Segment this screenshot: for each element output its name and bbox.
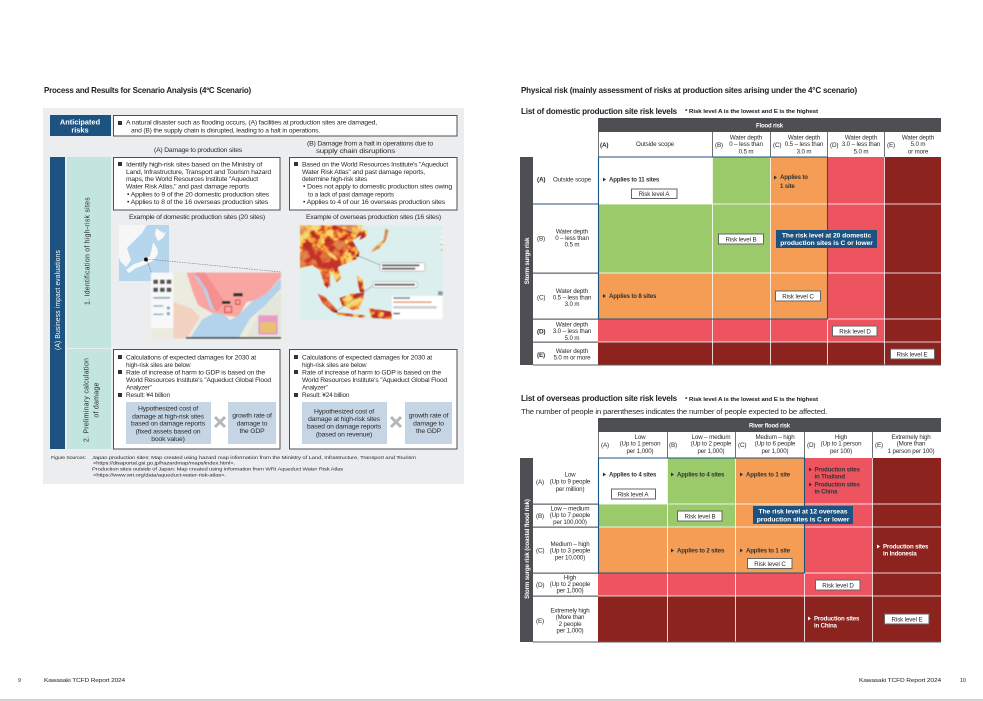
overseas row labels: (Up to 3 people (550, 548, 591, 554)
text box: identification A: Identify high-risk sites based on the Ministry of (126, 162, 262, 168)
domestic heat grid (598, 157, 941, 366)
risk level D (832, 326, 877, 336)
text box: damage calculation A: high-risk sites are below (126, 362, 191, 369)
overseas column headers: (D) (807, 442, 815, 449)
domestic row labels: 3.0 m (565, 301, 579, 308)
overseas column headers: 1 person per 100) (888, 448, 934, 455)
note: Thailand and China sites: in China (814, 488, 838, 496)
risk level E (884, 614, 929, 624)
domestic row labels (533, 157, 598, 366)
overseas row labels: (B) (536, 513, 544, 520)
domestic column headers (598, 132, 941, 157)
domestic row labels: Water depth (556, 228, 589, 236)
text box: damage calculation B: Result: ¥24 billion (302, 392, 350, 399)
text box: identification A: • Applies to 8 of the 16 overseas production sites (127, 199, 268, 206)
overseas row labels: Extremely high (550, 608, 590, 614)
callout: domestic result: production sites is C or lower (780, 240, 873, 247)
domestic row labels: 0 – less than (555, 235, 589, 242)
risk level B (678, 511, 722, 521)
overseas column headers: (More than (897, 440, 926, 448)
domestic row labels: 5.0 m (565, 335, 579, 342)
text box: identification A: Land, Infrastructure, Transport and Tourism hazard (126, 169, 272, 176)
domestic column headers: (C) (773, 142, 781, 149)
column heading B (307, 140, 434, 155)
anticipated risks text (114, 116, 457, 136)
overseas table note: * Risk level A is the lowest and E is the highest (685, 397, 818, 403)
overseas column headers: (Up to 1 person (821, 440, 862, 448)
overseas row labels: Low – medium (551, 506, 589, 512)
overseas column headers: (Up to 1 person (620, 440, 661, 448)
note: Thailand and China sites: in Thailand (814, 474, 845, 480)
storm surge axis (520, 157, 533, 365)
formula B: cost box: based on damage reports (307, 424, 382, 430)
formula B: multiply icon (391, 417, 401, 427)
callout: overseas result (753, 506, 853, 524)
overseas table heading: List of overseas production site risk levels (521, 393, 678, 403)
step 1 strip (67, 157, 111, 348)
note: applies to 11 sites: Applies to 11 sites (609, 176, 660, 184)
text box: damage calculation A: World Resources Institute's "Aqueduct Global Flood (126, 377, 272, 384)
note: Thailand and China sites (809, 466, 860, 496)
callout: domestic result (776, 230, 877, 248)
domestic column headers: Water depth (730, 134, 763, 142)
note: applies to 2 sites: Applies to 2 sites (677, 548, 725, 554)
overseas row labels: per 1,000) (556, 628, 584, 634)
text box: damage calculation A: Calculations of expected damages for 2030 at (126, 354, 256, 362)
formula A: cost box: based on damage reports (131, 420, 206, 428)
step 1 strip: 1. Identification of high-risk sites (84, 197, 92, 305)
note: China sites (808, 616, 860, 630)
business impact evaluations bar: (A) Business impact evaluations (55, 250, 62, 350)
note: Indonesia sites: in Indonesia (883, 550, 917, 558)
formula B: growth box: the GDP (416, 428, 442, 435)
risk level E: Risk level E (896, 352, 928, 358)
step 2 strip (67, 349, 111, 449)
overseas column headers: Medium – high (755, 434, 795, 441)
panel: scenario analysis process (43, 108, 464, 484)
domestic column headers: 0.5 – less than (785, 141, 824, 148)
note: applies to 4 sites, low: Applies to 4 sites (609, 472, 657, 478)
domestic column headers: Water depth (788, 134, 821, 142)
figure sources (51, 455, 416, 478)
formula A: cost box (126, 402, 211, 444)
formula B: growth box (405, 402, 452, 444)
figure sources: Production sites outside of Japan: Map created using information from WRI Aqueduct Water Risk Atlas (92, 466, 344, 472)
figure sources: <https://www.wri.org/data/aqueduct-water-risk-atlas>. (93, 472, 226, 478)
footer right: Kawasaki TCFD Report 2024 (859, 678, 941, 684)
note: Thailand and China sites: Production sites (814, 466, 860, 474)
text box: damage calculation A: Analyzer" (126, 384, 152, 392)
domestic row labels: 5.0 m or more (554, 354, 591, 362)
footer left: 9 (18, 678, 21, 684)
text box: identification B: to a lack of past damage reports (308, 192, 394, 198)
overseas row labels: (Up to 2 people (550, 581, 591, 588)
overseas column headers: (B) (669, 442, 677, 449)
anticipated risks label: risks (71, 126, 89, 134)
overseas row labels: (C) (536, 548, 544, 554)
overseas column headers: (Up to 2 people (691, 440, 732, 448)
text box: identification B: • Does not apply to domestic production sites owing (303, 184, 453, 190)
text box: identification A: • Applies to 9 of the 20 domestic production sites (127, 192, 269, 198)
text box: identification B: determine high-risk sites (302, 176, 367, 183)
overseas row labels: per million) (556, 486, 584, 493)
business impact evaluations bar (50, 157, 65, 449)
overseas column headers: High (835, 434, 848, 441)
domestic column headers: Water depth (902, 134, 935, 142)
overseas column headers: (Up to 6 people (755, 440, 796, 448)
text box: damage calculation A: Result: ¥4 billion (126, 392, 170, 399)
domestic column headers: Outside scope (636, 141, 675, 148)
overseas column headers: (E) (875, 442, 883, 449)
risk level A (632, 189, 677, 198)
domestic row labels: Water depth (556, 348, 589, 355)
formula B: growth box: damage to (413, 420, 444, 428)
step 2 strip: of damage (94, 382, 100, 418)
domestic row labels: 0.5 m (565, 242, 579, 248)
text box: identification B: • Applies to 4 of our 16 overseas production sites (303, 199, 445, 206)
domestic row labels: Outside scope (553, 176, 592, 184)
overseas row labels: (A) (536, 479, 544, 486)
risk level B: Risk level B (725, 236, 757, 244)
formula B: growth box: growth rate of (409, 412, 448, 420)
text box: damage calculation B: World Resources Institute's "Aqueduct Global Flood (302, 377, 448, 384)
overseas row labels: (Up to 7 people (550, 512, 591, 519)
note: applies to 1 site (774, 174, 808, 190)
note: Thailand and China sites: Production sites (814, 482, 860, 488)
domestic row labels: (C) (537, 294, 545, 302)
footer left (18, 678, 125, 684)
domestic row labels: Water depth (556, 288, 589, 295)
column heading A: (A) Damage to production sites (154, 147, 242, 154)
domestic column headers: (A) (600, 142, 608, 149)
text box: identification B: Based on the World Resources Institute's "Aqueduct (302, 162, 448, 168)
step 2 strip: 2. Preliminary calculation (84, 358, 90, 442)
text box: damage calculation B: Analyzer" (302, 384, 328, 392)
flood risk header: Flood risk (756, 124, 784, 130)
risk level A: Risk level A (639, 191, 670, 198)
formula B: cost box: Hypothesized cost of (314, 408, 374, 416)
overseas column headers: Low – medium (692, 434, 730, 441)
overseas row labels: (E) (536, 618, 544, 625)
overseas row labels (533, 458, 598, 642)
formula B: cost box: damage at high-risk sites (308, 416, 381, 423)
anticipated risks label: Anticipated (60, 118, 101, 126)
flood risk header (598, 118, 941, 132)
text box: identification B: Water Risk Atlas" and past damage reports, (302, 169, 425, 176)
domestic risk matrix (520, 118, 941, 366)
overseas row labels: (D) (536, 582, 544, 589)
map: domestic sites (119, 225, 281, 339)
formula B: cost box (302, 402, 387, 444)
caption: overseas map: Example of overseas production sites (16 sites) (306, 214, 441, 221)
text box: identification A: maps, the World Resources Institute "Aqueduct (126, 176, 258, 183)
overseas column headers: per 1,000) (626, 448, 654, 455)
left heading: Process and Results for Scenario Analysis (4ºC Scenario) (44, 85, 251, 95)
overseas column headers: per 1,000) (697, 448, 725, 455)
overseas heat grid (598, 458, 941, 642)
note: applies to 1 site: Applies to (780, 174, 808, 181)
domestic column headers: 0.5 m (739, 148, 753, 156)
risk level A: Risk level A (618, 492, 649, 498)
formula A: growth box: damage to (237, 420, 268, 428)
overseas row labels: Low (564, 472, 576, 478)
domestic column headers: 3.0 – less than (842, 141, 881, 148)
formula A: growth box (228, 402, 276, 444)
domestic row labels: (D) (537, 328, 545, 336)
domestic column headers: (B) (715, 142, 723, 149)
note: Indonesia sites: Production sites (883, 544, 929, 550)
formula A: multiply icon (215, 417, 225, 427)
domestic column headers: 0 – less than (729, 141, 763, 148)
anticipated risks text: and (B) the supply chain is disrupted, leading to a halt in operations. (131, 128, 320, 134)
overseas column headers: (C) (738, 442, 746, 449)
overseas column headers: Low (634, 434, 646, 441)
domestic column headers: 5.0 m (911, 141, 925, 148)
risk level E (890, 349, 934, 359)
column heading B: supply chain disruptions (316, 148, 395, 155)
note: applies to 4 sites, low-medium: Applies to 4 sites (677, 472, 725, 478)
text box: damage calculation B: Calculations of expected damages for 2030 at (302, 354, 432, 362)
footer right (859, 678, 966, 684)
overseas row labels: (Up to 9 people (550, 478, 591, 486)
risk level A (612, 489, 656, 499)
overseas row labels: 2 people (559, 621, 582, 628)
callout: overseas result: The risk level at 12 overseas (759, 508, 848, 516)
overseas row labels: High (564, 574, 577, 582)
text box: identification A: Water Risk Atlas," and past damage reports (126, 184, 249, 190)
domestic table heading: List of domestic production site risk levels (521, 106, 678, 116)
note: applies to 8 sites: Applies to 8 sites (609, 293, 657, 300)
map: overseas sites (300, 225, 443, 320)
note: Indonesia sites (877, 544, 929, 558)
river flood header: River flood risk (749, 424, 791, 430)
formula A: cost box: book value) (151, 436, 185, 443)
risk level C: Risk level C (754, 561, 786, 568)
text box: identification A (114, 158, 280, 210)
text box: identification B (290, 158, 457, 210)
note: China sites: in China (814, 622, 838, 630)
storm surge axis: Storm surge risk (524, 237, 531, 284)
domestic row labels: (A) (537, 176, 545, 184)
figure sources: Figure Sources: (51, 455, 86, 460)
overseas row labels: per 10,000) (555, 554, 585, 562)
risk level D (816, 580, 860, 590)
storm surge coastal axis (520, 458, 533, 642)
overseas row labels: per 100,000) (553, 519, 587, 526)
footer left: Kawasaki TCFD Report 2024 (44, 678, 125, 684)
callout: overseas result: production sites is C or lower (757, 516, 850, 524)
text box: damage calculation B: Rate of increase of harm to GDP is based on the (302, 370, 442, 376)
overseas column headers: Extremely high (891, 434, 931, 441)
overseas column headers (598, 432, 941, 458)
caption: domestic map: Example of domestic production sites (20 sites) (129, 214, 265, 221)
risk level C (748, 558, 792, 568)
formula A: cost box: (fixed assets based on (136, 428, 201, 436)
overseas table subnote: The number of people in parentheses indicates the number of people expected to be affected. (521, 409, 827, 416)
footer right: 10 (960, 678, 966, 684)
anticipated risks label (50, 115, 111, 136)
domestic column headers: 5.0 m (854, 148, 868, 156)
text box: damage calculation B: high-risk sites are below (302, 362, 367, 369)
note: applies to 1 site, medium-high: Applies to 1 site (746, 472, 791, 478)
domestic row labels: 3.0 – less than (553, 328, 592, 335)
text box: damage calculation A (114, 350, 280, 449)
note: applies to 1 site: 1 site (780, 183, 795, 190)
risk level C: Risk level C (782, 294, 814, 300)
text box: damage calculation A: Rate of increase of harm to GDP is based on the (126, 370, 266, 376)
formula B: cost box: (based on revenue) (316, 432, 372, 438)
note: applies to 1 site, row C: Applies to 1 site (746, 548, 791, 554)
figure sources: Japan production sites: Map created using hazard map information from the Ministry of Land, Infrastructure, Transport and Tourism (92, 455, 416, 460)
domestic column headers: (D) (830, 142, 838, 149)
column heading B: (B) Damage from a halt in operations due to (307, 140, 434, 148)
domestic row labels: (E) (537, 352, 545, 359)
formula A: cost box: damage at high-risk sites (132, 414, 205, 420)
text box: damage calculation B (290, 350, 457, 449)
domestic column headers: Water depth (845, 134, 878, 142)
risk level B: Risk level B (684, 514, 716, 520)
overseas row labels: Medium – high (550, 541, 590, 548)
domestic row labels: Water depth (556, 322, 589, 328)
risk level D: Risk level D (822, 582, 854, 590)
domestic column headers: or more (908, 148, 929, 156)
figure sources: <https://disaportal.gsi.go.jp/hazardmap/maps/index.html>. (93, 460, 235, 466)
domestic row labels: 0.5 – less than (553, 294, 592, 302)
risk level E: Risk level E (891, 616, 923, 624)
storm surge coastal axis: Storm surge risk (coastal flood risk) (524, 499, 531, 599)
overseas column headers: (A) (601, 442, 609, 449)
domestic column headers: (E) (887, 142, 895, 149)
formula A: cost box: Hypothesized cost of (138, 406, 198, 412)
callout: domestic result: The risk level at 20 domestic (782, 232, 871, 240)
domestic column headers: 3.0 m (797, 148, 811, 156)
highlight outline: C or lower (598, 157, 828, 319)
anticipated risks text: A natural disaster such as flooding occurs, (A) facilities at production sites are damaged, (126, 120, 377, 126)
domestic table note: * Risk level A is the lowest and E is the highest (685, 109, 818, 115)
risk level B (718, 234, 764, 244)
note: China sites: Production sites (814, 616, 860, 622)
overseas risk matrix (520, 418, 941, 642)
river flood header (598, 418, 941, 432)
overseas row labels: per 1,000) (556, 588, 584, 594)
overseas column headers: per 100) (830, 448, 852, 455)
formula A: growth box: the GDP (239, 428, 265, 435)
overseas row labels: (More than (556, 614, 585, 621)
risk level C (776, 291, 820, 301)
overseas column headers: per 1,000) (761, 448, 789, 455)
formula A: growth box: growth rate of (232, 412, 272, 420)
domestic row labels: (B) (537, 236, 545, 242)
risk level D: Risk level D (839, 328, 871, 336)
highlight outline: C or lower (598, 458, 804, 573)
right heading: Physical risk (mainly assessment of risks at production sites arising under the 4°C scenario) (521, 85, 857, 95)
